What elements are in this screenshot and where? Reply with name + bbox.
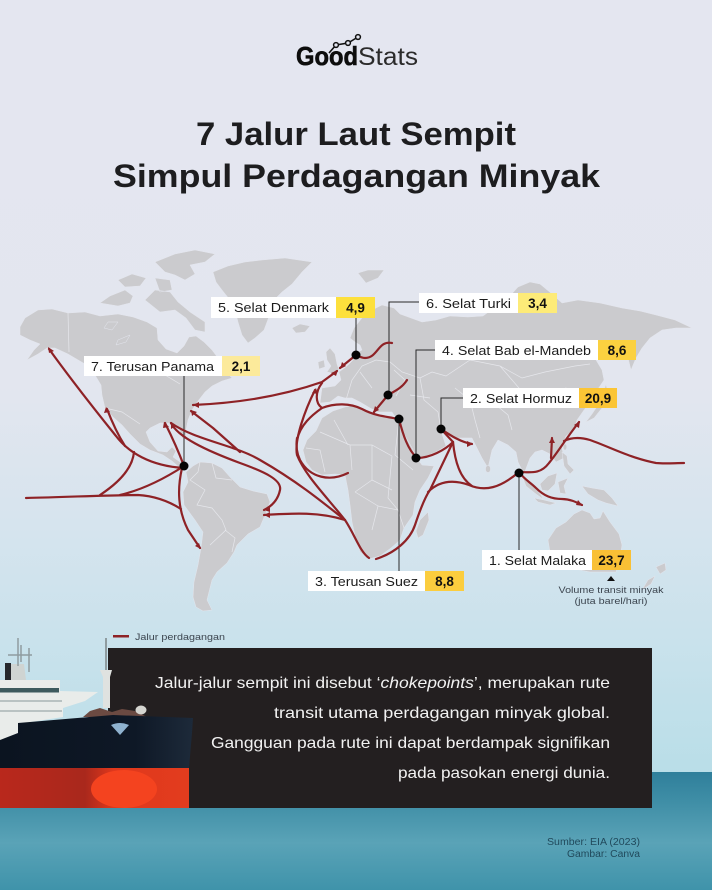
label: 5. Selat Denmark 4,9: 4,9 — [346, 300, 365, 316]
landmass: Australia — [548, 510, 622, 572]
landmass: Borneo — [540, 473, 557, 491]
route: Cape around West Africa — [296, 390, 369, 558]
landmass: Sumatra and Java — [522, 476, 556, 505]
leader lines — [184, 302, 519, 571]
label: 7. Terusan Panama 2,1: 7. Terusan Panama — [91, 359, 215, 374]
route: Cape to Brazil — [264, 514, 345, 520]
label: 4. Selat Bab el-Mandeb 8,6: 4. Selat Bab el-Mandeb — [442, 343, 591, 358]
source: Sumber: EIA (2023) — [547, 837, 640, 848]
route: Gibraltar approach — [297, 408, 322, 440]
route: Pacific to Panama — [120, 466, 184, 495]
title — [113, 116, 600, 194]
route: Pacific trunk to Peru — [26, 495, 181, 509]
route: Hormuz to Arabian Sea — [441, 429, 453, 442]
source: Gambar: Canva — [567, 849, 641, 860]
text panel: pada pasokan energi dunia. — [398, 765, 610, 782]
hull mark — [111, 723, 129, 735]
route: North Atlantic — [193, 371, 337, 405]
logo: GoodStats: Stats — [358, 43, 418, 71]
route: Turkish straits — [374, 380, 407, 412]
landmass: Sulawesi — [558, 478, 568, 494]
landmass: New Guinea — [582, 486, 618, 506]
ship superstructure — [0, 638, 98, 742]
world map — [20, 250, 692, 611]
route: Pacific to Mexico coast — [100, 452, 134, 495]
route: Arabian Sea to Indian Ocean — [453, 442, 472, 486]
route: Arabian Sea to Cape — [376, 442, 453, 559]
background sea — [0, 772, 712, 890]
label: 7. Terusan Panama 2,1: 2,1 — [232, 359, 251, 374]
ship — [0, 638, 193, 808]
route: South China Sea spur — [551, 438, 552, 458]
title: 7 Jalur Laut Sempit — [196, 116, 516, 152]
title: Simpul Perdagangan Minyak — [113, 158, 600, 194]
route: Indian Ocean to East Asia — [428, 422, 579, 492]
route: Panama to Gulf — [165, 423, 184, 466]
text panel: Gangguan pada rute ini dapat berdampak signifikan — [211, 735, 610, 752]
country borders — [68, 313, 590, 552]
route: Panama to California — [107, 409, 125, 446]
route: Malacca to Indonesia — [519, 472, 582, 505]
label: 2. Selat Hormuz 20,9: 20,9 — [585, 391, 611, 406]
landmass: Philippines — [562, 452, 574, 474]
volume note: Volume transit minyak — [558, 585, 664, 596]
landmass: North America — [20, 309, 232, 468]
logo: GoodStats — [296, 35, 418, 71]
label: 3. Terusan Suez 8,8: 8,8 — [435, 574, 454, 589]
label: 5. Selat Denmark 4,9: 5. Selat Denmark — [218, 300, 330, 315]
route: US East Coast to Gulf trunk — [191, 411, 240, 452]
landmass: United Kingdom and Ireland — [318, 348, 339, 373]
landmass: Sri Lanka — [486, 466, 490, 472]
trade routes — [26, 343, 684, 559]
landmass: Greenland — [213, 258, 312, 343]
label: 7. Terusan Panama 2,1 — [84, 356, 260, 376]
landmass: Africa — [303, 405, 434, 559]
landmass: Iceland — [292, 324, 310, 333]
label: 2. Selat Hormuz 20,9: 2. Selat Hormuz — [470, 391, 572, 406]
landmass: Canadian Arctic islands — [100, 250, 215, 345]
route: Gulf to Cape — [171, 423, 345, 520]
landmass: New Zealand — [642, 563, 666, 590]
text panel — [108, 648, 652, 808]
text panel: Jalur-jalur sempit ini disebut ‘ chokepoints ’, merupakan rute — [155, 675, 610, 692]
label: 3. Terusan Suez 8,8 — [308, 571, 464, 591]
landmass: South America — [183, 462, 270, 611]
volume note — [558, 576, 664, 607]
volume note: (juta barel/hari) — [574, 596, 648, 607]
choke point markers — [180, 350, 524, 478]
landmass: Svalbard — [358, 270, 384, 283]
label: 4. Selat Bab el-Mandeb 8,6: 8,6 — [608, 343, 627, 358]
route: Mediterranean — [317, 383, 399, 419]
label: 5. Selat Denmark 4,9 — [211, 297, 375, 318]
legend: trade route: Jalur perdagangan — [135, 632, 225, 643]
bulbous bow highlight — [91, 770, 157, 808]
route: Hormuz to India — [441, 429, 472, 444]
ship hull black — [0, 715, 193, 768]
route arrowheads — [48, 347, 583, 549]
route: Red Sea — [399, 419, 453, 458]
route: Panama to Chile — [179, 468, 200, 548]
logo: GoodStats: Good — [296, 41, 358, 71]
landmass: Eurasia — [320, 282, 692, 474]
route: Gulf of Guinea — [296, 438, 348, 478]
label: 1. Selat Malaka 23,7: 23,7 — [598, 553, 625, 568]
label: 2. Selat Hormuz 20,9 — [463, 388, 617, 408]
label: 3. Terusan Suez 8,8: 3. Terusan Suez — [315, 574, 418, 589]
label: 6. Selat Turki 3,4: 3,4 — [528, 296, 547, 311]
route: Gulf to Brazil — [171, 423, 280, 510]
source — [547, 837, 641, 860]
route: Trans-Pacific — [564, 438, 684, 463]
route: Baltic — [340, 343, 392, 368]
label: 1. Selat Malaka 23,7 — [482, 550, 631, 570]
ship mast — [100, 638, 112, 708]
label: 1. Selat Malaka 23,7: 1. Selat Malaka — [489, 553, 587, 568]
landmass: Madagascar — [416, 512, 429, 538]
route: Panama to Alaska — [49, 349, 184, 468]
landmass: Taiwan — [563, 444, 567, 450]
label: 6. Selat Turki 3,4 — [419, 293, 557, 313]
ship hull red — [0, 768, 189, 808]
label: 6. Selat Turki 3,4: 6. Selat Turki — [426, 296, 511, 311]
deck equipment — [83, 706, 147, 717]
landmass: Japan — [586, 384, 608, 422]
label: 4. Selat Bab el-Mandeb 8,6 — [435, 340, 636, 360]
text panel: transit utama perdagangan minyak global. — [274, 705, 610, 722]
